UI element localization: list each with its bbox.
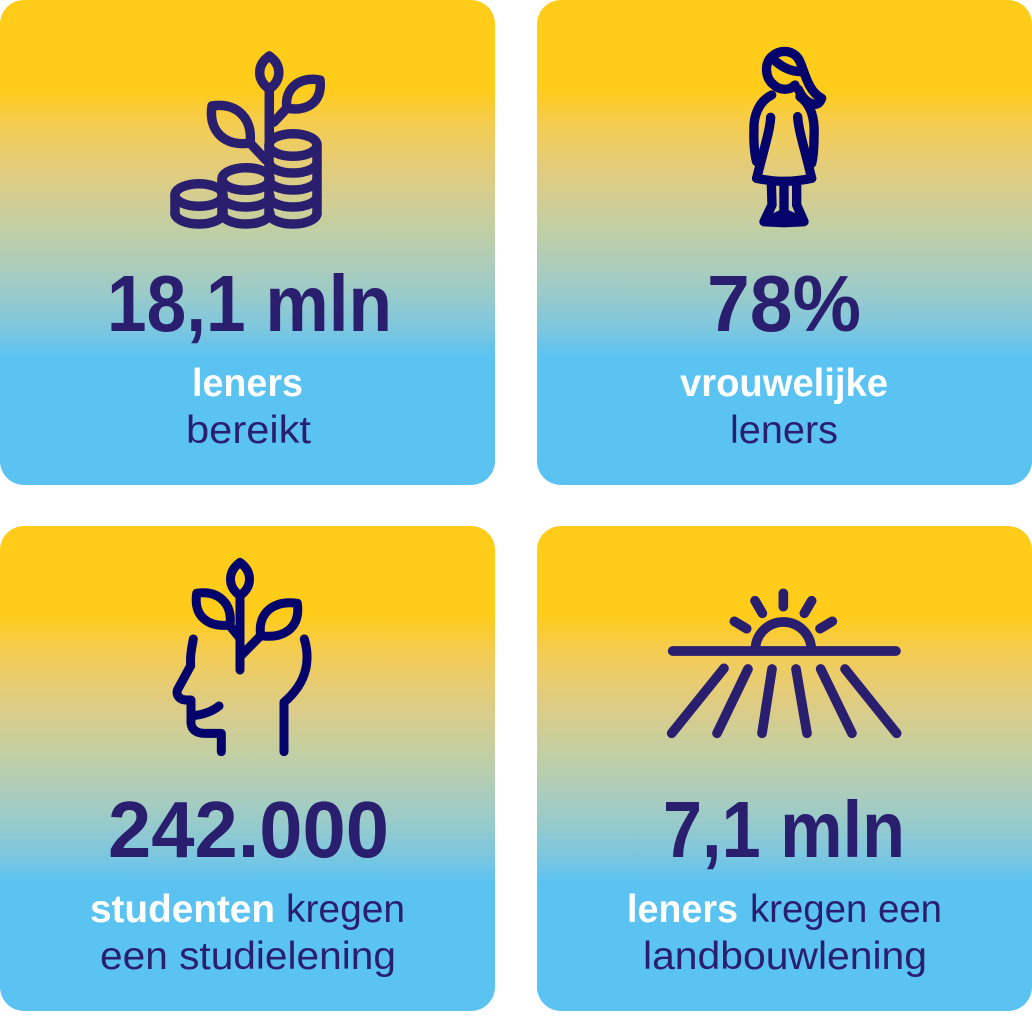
label: studenten kregen [90,888,405,931]
label: bereikt: bereikt [186,409,311,452]
label: leners kregen een: leners [627,888,738,931]
icon: coin stacks with plant [175,56,320,224]
label: leners: leners [730,409,838,452]
number: 7,1 mln: 7,1 mln [663,785,905,874]
icon: woman [754,51,822,223]
number: 242.000: 242.000 [108,785,389,874]
label: leners: leners [192,362,303,405]
icon: sun over field [672,593,897,733]
label: vrouwelijke: vrouwelijke [680,362,888,405]
label: studenten kregen: studenten [90,888,275,931]
panel: leners bereikt [0,0,495,485]
number: 78%: 78% [707,259,861,348]
number: 18,1 mln: 18,1 mln [107,259,392,348]
label: een studielening: een studielening [100,935,396,978]
label: leners kregen een: kregen een [750,888,942,931]
icon: head with plant [177,562,307,752]
label: leners kregen een [627,888,942,931]
panel: vrouwelijke leners [537,0,1032,485]
label: landbouwlening: landbouwlening [643,935,927,978]
panel: landbouwlening [537,526,1032,1011]
label: studenten kregen: kregen [286,888,405,931]
panel: studenten [0,526,495,1011]
